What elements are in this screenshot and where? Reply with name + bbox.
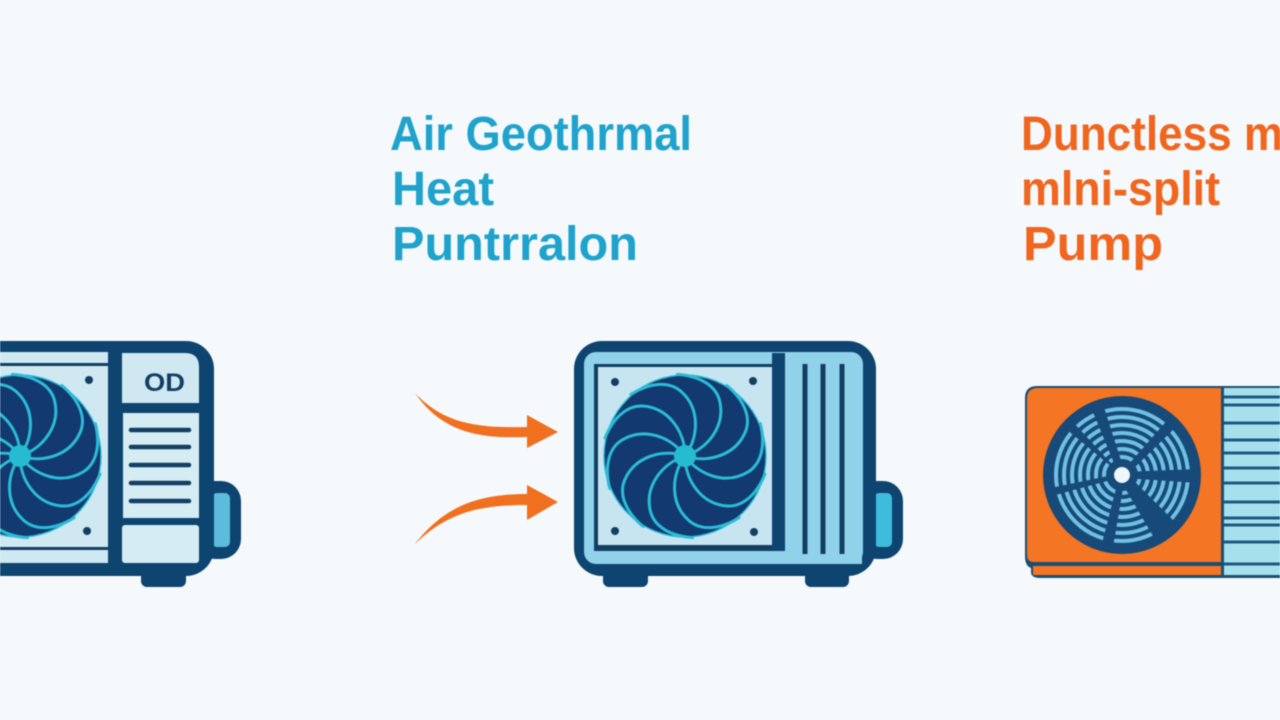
left outdoor unit — [0, 341, 241, 587]
icon: left unit side handle — [195, 481, 241, 559]
arrow: lower orange airflow — [415, 485, 558, 544]
heading: ductless mini-split pump: Pump — [1023, 218, 1163, 271]
icon: right unit grille fan — [1043, 396, 1201, 554]
icon: centre unit side handle — [857, 481, 903, 559]
left unit casing — [0, 341, 214, 576]
icon: centre unit swirl fan — [591, 364, 779, 548]
heading: ductless mini-split pump: mlni-split — [1021, 163, 1220, 216]
right unit casing — [1025, 386, 1280, 578]
centre unit side fins — [785, 353, 862, 564]
left unit display box: OD — [144, 369, 185, 397]
left unit fan panel — [0, 352, 108, 563]
left unit display box — [122, 353, 199, 403]
icon: left unit swirl fan — [0, 364, 114, 548]
heading: ductless mini-split pump — [1021, 108, 1280, 271]
heading: air geothermal heat pump — [390, 108, 692, 271]
arrow: upper orange airflow — [415, 393, 558, 448]
icon: left unit foot — [141, 565, 186, 587]
centre unit casing — [574, 341, 876, 576]
heading: air geothermal heat pump: Heat — [392, 163, 494, 216]
left unit lower box — [122, 525, 199, 563]
right unit fin grille — [1224, 388, 1280, 575]
left unit vent box — [123, 413, 199, 518]
centre outdoor unit — [574, 341, 903, 587]
icon: centre unit feet — [603, 565, 849, 587]
centre unit inner frame — [584, 352, 863, 564]
right ductless outdoor unit — [1025, 386, 1280, 578]
heading: air geothermal heat pump: Puntrralon — [392, 218, 638, 271]
heading: air geothermal heat pump: Air Geothrmal — [390, 108, 692, 161]
centre unit fan panel — [594, 353, 785, 551]
